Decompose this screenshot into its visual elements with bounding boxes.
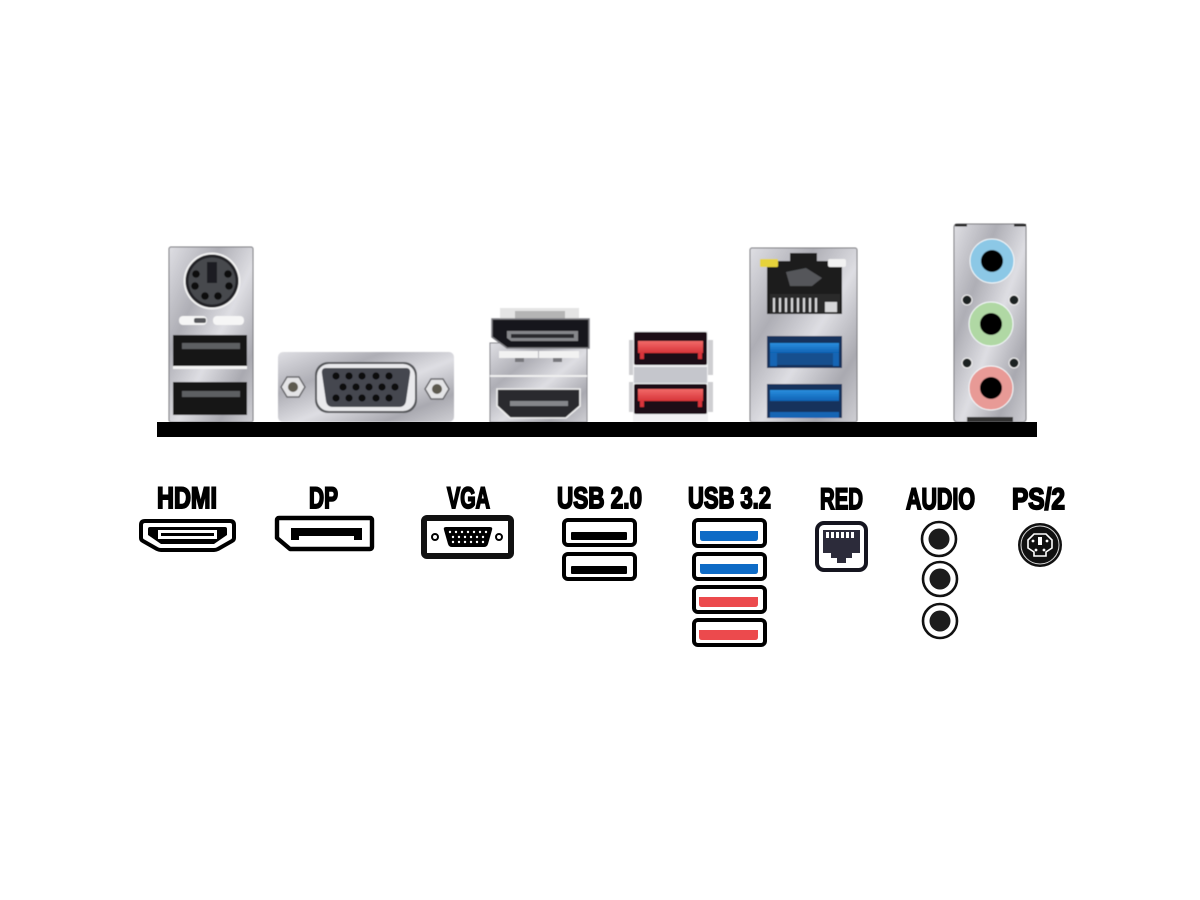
port: PS/2 and USB 2.0 stack bbox=[169, 247, 253, 422]
blue audio jack bbox=[970, 239, 1014, 283]
USB 2.0 port lower bbox=[173, 382, 247, 415]
label: DP: DP bbox=[309, 482, 338, 515]
icon: USB 3.2 red lower bbox=[694, 620, 765, 645]
icon: USB 3.2 red upper bbox=[694, 587, 765, 612]
RJ45 socket bbox=[760, 253, 846, 314]
icon: RJ45 network bbox=[817, 523, 866, 570]
VGA screw left bbox=[281, 377, 305, 397]
label: VGA: VGA bbox=[447, 482, 490, 515]
label: USB 2.0: USB 2.0 bbox=[557, 482, 642, 515]
label: USB 3.2: USB 3.2 bbox=[688, 482, 771, 515]
port: audio jack stack bbox=[954, 224, 1026, 422]
port: VGA bbox=[278, 352, 454, 422]
black base bar bbox=[157, 422, 1037, 437]
icon: audio jack middle bbox=[923, 562, 957, 596]
DisplayPort socket bbox=[492, 319, 589, 348]
icon: PS/2 bbox=[1018, 523, 1062, 567]
icon: USB 2.0 upper bbox=[564, 520, 635, 545]
red USB port lower bbox=[634, 384, 707, 414]
label: PS/2: PS/2 bbox=[1012, 483, 1065, 516]
port: red USB 3.2 stack bbox=[629, 331, 713, 422]
HDMI socket bbox=[497, 389, 580, 418]
icon: audio jack top bbox=[922, 522, 956, 556]
green audio jack bbox=[969, 302, 1013, 346]
VGA screw right bbox=[425, 379, 449, 399]
red USB port upper bbox=[634, 332, 707, 365]
pink audio jack bbox=[969, 366, 1013, 410]
label: AUDIO: AUDIO bbox=[906, 483, 975, 516]
USB 2.0 port upper bbox=[173, 335, 247, 369]
blue USB port lower bbox=[767, 384, 842, 418]
icon: audio jack bottom bbox=[923, 604, 957, 638]
icon: DisplayPort bbox=[277, 518, 372, 549]
label: HDMI: HDMI bbox=[157, 482, 217, 515]
port: LAN and blue USB 3.2 stack bbox=[750, 248, 857, 422]
PS/2 socket bbox=[184, 252, 240, 310]
icon: USB 3.2 blue upper bbox=[694, 520, 765, 546]
icon: HDMI bbox=[141, 521, 234, 550]
icon: USB 3.2 blue lower bbox=[694, 554, 765, 579]
port photographs group bbox=[169, 224, 1026, 422]
port: DisplayPort and HDMI stack bbox=[490, 308, 589, 422]
icon: VGA bbox=[424, 518, 511, 556]
label: RED: RED bbox=[820, 483, 863, 516]
blue USB port upper bbox=[767, 336, 842, 368]
icon: USB 2.0 lower bbox=[564, 554, 635, 579]
